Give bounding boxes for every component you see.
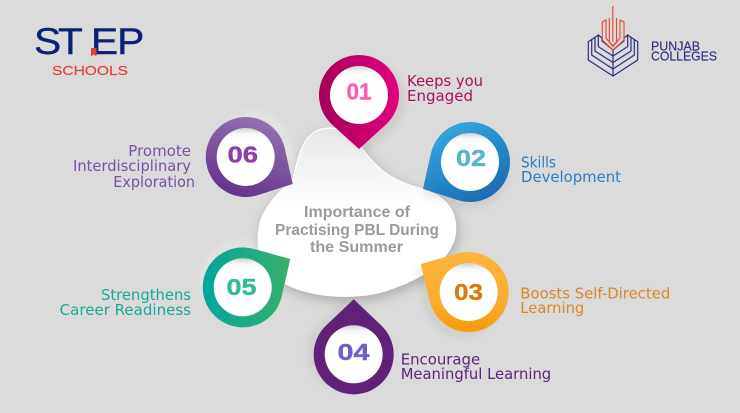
pin 02: Skills Development: Skills	[521, 153, 556, 171]
pin 06: Promote Interdisciplinary Exploration: Promote	[128, 142, 191, 160]
pin 01: Keeps you Engaged: Engaged	[407, 87, 473, 105]
pin 06: Promote Interdisciplinary Exploration: Interdisciplinary	[73, 157, 191, 175]
pin 03: Boosts Self-Directed Learning	[421, 252, 670, 332]
pin 06: Promote Interdisciplinary Exploration: 06	[228, 141, 258, 167]
central blob with title: Importance of	[304, 204, 411, 221]
pin 01: Keeps you Engaged: 01	[346, 78, 372, 104]
pin 05: Strengthens Career Readiness: Strengthens	[101, 286, 191, 304]
pin 01: Keeps you Engaged: Keeps you	[407, 72, 483, 90]
central blob with title	[258, 128, 456, 297]
pin 03: Boosts Self-Directed Learning: Learning	[520, 299, 584, 317]
central blob with title: Practising PBL During	[275, 222, 439, 239]
pin 05: Strengthens Career Readiness	[60, 247, 290, 327]
pin 03: Boosts Self-Directed Learning: 03	[454, 279, 483, 305]
pin 04: Encourage Meaningful Learning: 04	[338, 339, 370, 365]
pin 02: Skills Development: 02	[456, 145, 486, 171]
pin 02: Skills Development	[423, 122, 621, 202]
pin 03: Boosts Self-Directed Learning: Boosts Self-Directed	[520, 284, 670, 302]
pin 02: Skills Development: Development	[521, 168, 621, 186]
pin 05: Strengthens Career Readiness: 05	[226, 274, 256, 300]
pin 06: Promote Interdisciplinary Exploration	[73, 117, 293, 197]
logo: STEP Schools: SCHOOLS	[52, 63, 128, 78]
logo: Punjab Colleges	[588, 6, 717, 76]
pin 04: Encourage Meaningful Learning	[314, 299, 551, 394]
pin 04: Encourage Meaningful Learning: Meaningful Learning	[401, 365, 551, 383]
logo: STEP Schools: STEP	[34, 22, 144, 63]
pin 06: Promote Interdisciplinary Exploration: Exploration	[113, 173, 195, 191]
pin 05: Strengthens Career Readiness: Career Readiness	[60, 301, 191, 319]
logo: Punjab Colleges: PUNJAB	[651, 39, 700, 54]
pin 01: Keeps you Engaged	[319, 55, 483, 149]
central blob with title: the Summer	[310, 239, 403, 256]
pin 04: Encourage Meaningful Learning: Encourage	[401, 350, 480, 368]
logo: Punjab Colleges: COLLEGES	[651, 49, 717, 64]
